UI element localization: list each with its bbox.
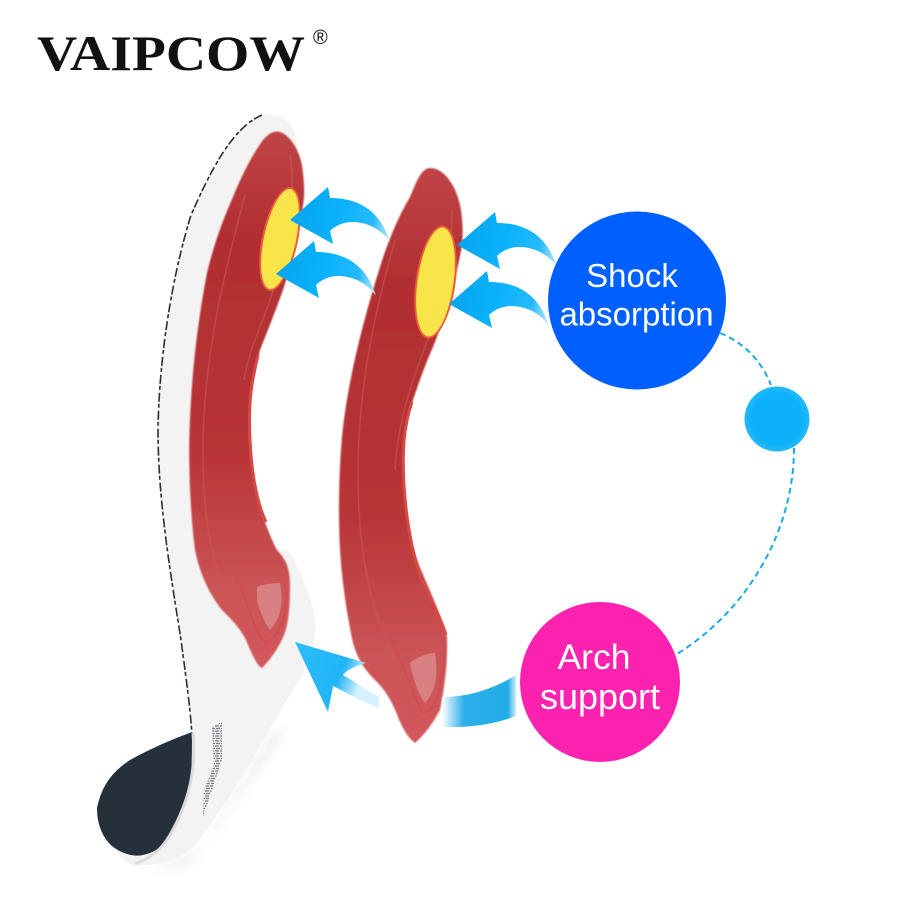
dashed connector: upper bbox=[720, 333, 771, 385]
contour lines bbox=[203, 155, 292, 650]
node: arch support: Arch bbox=[558, 637, 630, 677]
ribbed inner edge bbox=[403, 402, 446, 635]
node: arch support bbox=[520, 602, 680, 762]
forefoot contour bbox=[392, 640, 445, 713]
forefoot highlight bbox=[410, 653, 436, 703]
ribbed inner edge bbox=[249, 355, 266, 522]
curved arrow: lower left bbox=[276, 241, 376, 298]
curved arrow: upper left bbox=[290, 187, 390, 244]
logo: VAIPCOW: ® bbox=[313, 27, 328, 49]
contour lines bbox=[358, 210, 452, 715]
node: shock absorption: absorption bbox=[559, 296, 714, 332]
right red gel pad bbox=[339, 168, 463, 743]
speckled dark outer edge bbox=[158, 115, 262, 735]
yellow shock pad bbox=[251, 183, 309, 295]
node: shock absorption bbox=[548, 212, 726, 390]
curved arrow: lower right bbox=[449, 271, 549, 328]
white foam body bbox=[112, 114, 315, 865]
forefoot contour bbox=[232, 570, 287, 641]
curved arrow: upper right bbox=[457, 212, 557, 269]
forefoot highlight bbox=[257, 583, 281, 630]
mesh print bbox=[203, 722, 222, 817]
yellow shock pad bbox=[408, 223, 463, 341]
rim between pad and foam bbox=[135, 733, 194, 864]
node: arch support: support bbox=[540, 676, 660, 717]
dashed connector: lower bbox=[677, 448, 794, 654]
node: small blue dot bbox=[744, 386, 810, 452]
dark heel pad bbox=[97, 732, 192, 856]
arch arrow: head and tail bbox=[295, 642, 516, 727]
logo: VAIPCOW: VAIPCOW bbox=[37, 25, 305, 81]
node: shock absorption: Shock bbox=[586, 257, 678, 294]
left red gel pad bbox=[189, 131, 309, 668]
floor shadow bbox=[150, 728, 285, 870]
insole: full side view with white foam and dark pad bbox=[97, 114, 315, 870]
